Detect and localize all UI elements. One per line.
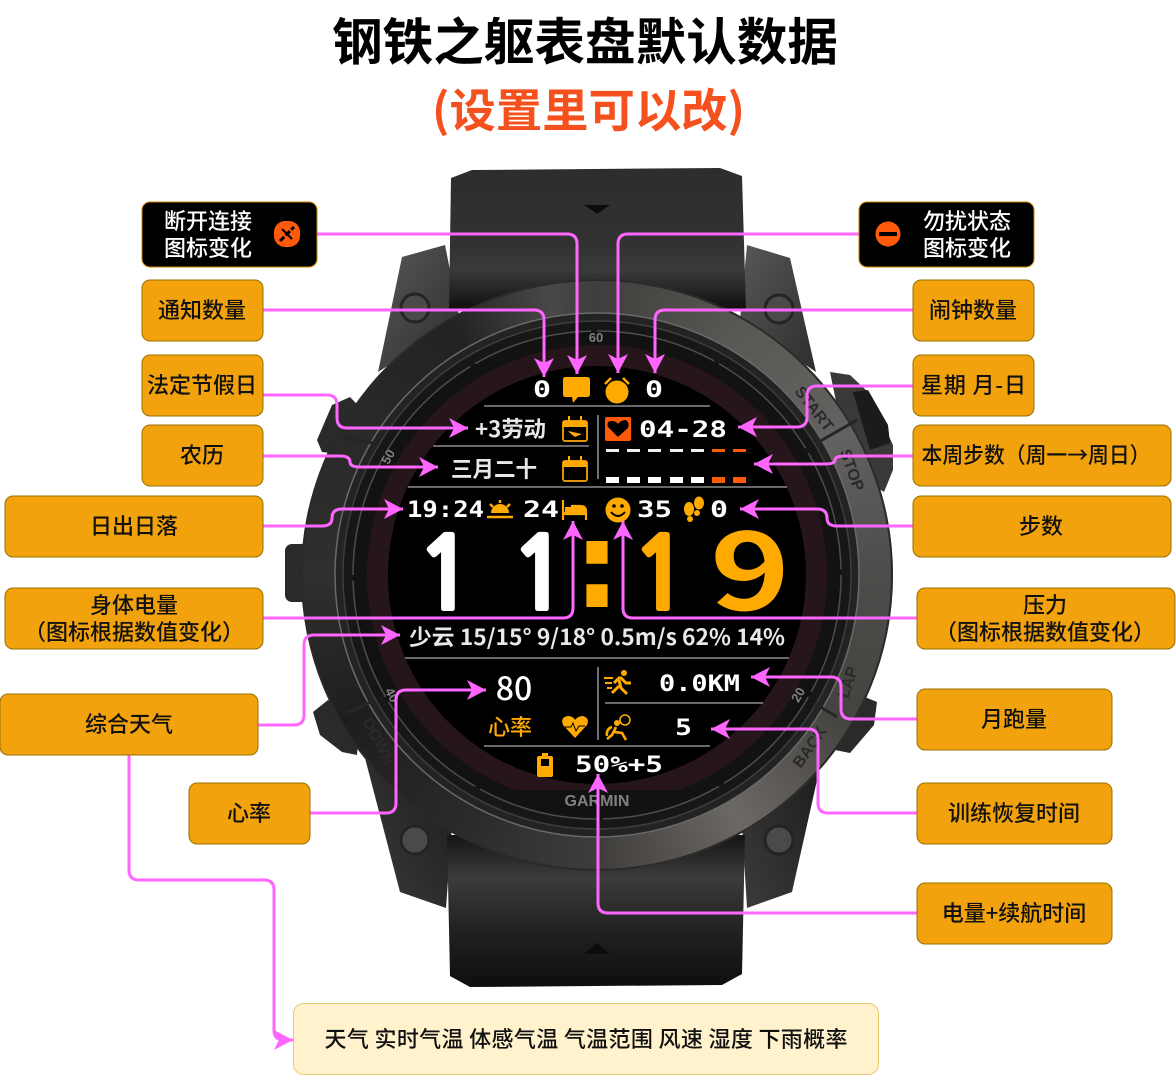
icon: smiley stress	[606, 498, 630, 522]
label: disconnect icon change: 断开连接	[164, 204, 252, 236]
watch face content	[405, 377, 790, 778]
label: steps	[913, 496, 1171, 557]
clock hours: 1	[415, 525, 476, 624]
watch screen	[388, 366, 806, 784]
label: steps: 步数	[1019, 509, 1063, 541]
label: monthly running	[917, 689, 1112, 750]
bezel scale ring	[335, 313, 859, 837]
recovery hours: 5	[675, 716, 692, 741]
label: disconnect icon change	[142, 202, 317, 267]
stress value: 35	[637, 498, 672, 523]
label: weekly steps: 本周步数（周一→周日）	[922, 438, 1150, 470]
sunset time: 19:24	[407, 498, 484, 523]
strap arrow bottom	[584, 943, 610, 954]
alarm count: 0	[645, 378, 663, 403]
subtitle: (设置里可以改)	[432, 75, 745, 141]
clock minutes	[630, 488, 790, 641]
lug bottom left	[365, 758, 452, 908]
bezel engravings: GARMIN	[565, 793, 629, 810]
bezel engravings: BACK	[790, 723, 831, 771]
icon: heart date badge	[605, 417, 631, 441]
icon: do not disturb	[876, 222, 900, 246]
clock colon: :	[573, 497, 621, 636]
icon: heart rate	[562, 716, 588, 738]
holiday text: +3劳动	[475, 412, 546, 444]
label: stress: 压力	[1023, 588, 1067, 620]
label: heart rate	[189, 783, 310, 844]
notification count: 0	[533, 378, 551, 403]
lunar date: 三月二十	[451, 452, 537, 484]
label: notification count	[142, 280, 263, 341]
bezel engravings: LAP	[836, 664, 862, 700]
top strap	[449, 168, 746, 310]
side buttons	[285, 372, 893, 755]
sleep value: 24	[523, 498, 559, 523]
bezel engravings: 40	[382, 685, 402, 705]
icon: footprints	[684, 496, 704, 522]
label: monthly running: 月跑量	[981, 702, 1047, 734]
label: stress: （图标根据数值变化）	[935, 615, 1155, 647]
label: body battery: 身体电量	[90, 588, 178, 620]
label: disconnect icon change: 图标变化	[164, 231, 252, 263]
label: battery and endurance	[917, 883, 1112, 944]
bottom strap	[447, 835, 745, 987]
label: stress	[917, 588, 1175, 649]
clock minutes: 9	[710, 488, 790, 641]
case screws	[401, 294, 793, 854]
date: 04-28	[639, 418, 727, 443]
bezel engravings: START	[791, 383, 836, 435]
label: lunar calendar	[142, 425, 263, 486]
icon: calendar	[563, 456, 587, 481]
label: training recovery: 训练恢复时间	[948, 796, 1080, 828]
label: do not disturb icon change: 勿扰状态	[923, 204, 1011, 236]
weather details legend: 天气 实时气温 体感气温 气温范围 风速 湿度 下雨概率	[324, 1022, 848, 1054]
icon: bed	[563, 500, 586, 520]
icon: disconnected	[274, 221, 300, 247]
lug top left	[378, 245, 460, 372]
label: weekly steps	[913, 425, 1171, 486]
bezel engravings: 20	[788, 685, 808, 705]
divider lines	[405, 406, 789, 746]
label: training recovery	[917, 783, 1112, 844]
icon: chat bubble	[563, 377, 590, 403]
callout arrows	[129, 234, 917, 1040]
bezel engravings: DOWN	[359, 716, 397, 768]
monthly distance: 0.0KM	[659, 672, 740, 697]
icon: sunrise	[487, 500, 513, 517]
bezel engravings	[343, 330, 867, 810]
icon: recovery	[607, 715, 630, 740]
label: do not disturb icon change: 图标变化	[923, 231, 1011, 263]
label: notification count: 通知数量	[158, 293, 246, 325]
label: sunrise sunset: 日出日落	[90, 509, 178, 541]
label: public holiday	[142, 355, 263, 416]
label: body battery	[5, 588, 263, 649]
label: combined weather: 综合天气	[85, 707, 173, 739]
weekly steps dashes	[606, 449, 746, 483]
label: weekday date	[913, 355, 1034, 416]
bezel engravings: 60	[589, 330, 603, 345]
bezel engravings: LIGHT	[358, 381, 401, 429]
icon: battery	[537, 753, 553, 777]
label: lunar calendar: 农历	[180, 438, 224, 470]
strap arrow top	[584, 205, 610, 214]
lug bottom right	[742, 758, 822, 908]
label: sunrise sunset	[5, 496, 263, 557]
weather line: 少云 15/15° 9/18° 0.5m/s 62% 14%	[409, 620, 785, 652]
label: alarm count	[913, 280, 1034, 341]
steps value: 0	[710, 498, 728, 523]
bezel engravings: 50	[378, 447, 398, 467]
clock minutes: 1	[630, 525, 691, 624]
label: alarm count: 闹钟数量	[929, 293, 1017, 325]
lug top right	[740, 245, 816, 372]
label: combined weather	[0, 694, 258, 755]
bezel engravings: STOP	[836, 447, 867, 494]
icon: alarm clock	[605, 378, 629, 404]
label: heart rate: 心率	[227, 796, 271, 828]
icon: holiday calendar	[563, 416, 587, 441]
clock hours	[415, 525, 570, 624]
battery text: 50%+5	[575, 753, 663, 778]
weather details legend	[294, 1004, 878, 1074]
watch bezel	[301, 279, 893, 871]
label: public holiday: 法定节假日	[147, 368, 257, 400]
title: 钢铁之躯表盘默认数据	[332, 1, 838, 75]
heart rate label: 心率	[488, 710, 532, 742]
label: do not disturb icon change	[859, 202, 1034, 267]
label: weekday date: 星期 月-日	[921, 368, 1026, 400]
label: body battery: （图标根据数值变化）	[24, 615, 244, 647]
clock hours: 1	[509, 525, 570, 624]
icon: running	[604, 670, 631, 694]
heart rate value: 80	[496, 664, 532, 710]
label: battery and endurance: 电量+续航时间	[942, 896, 1086, 928]
